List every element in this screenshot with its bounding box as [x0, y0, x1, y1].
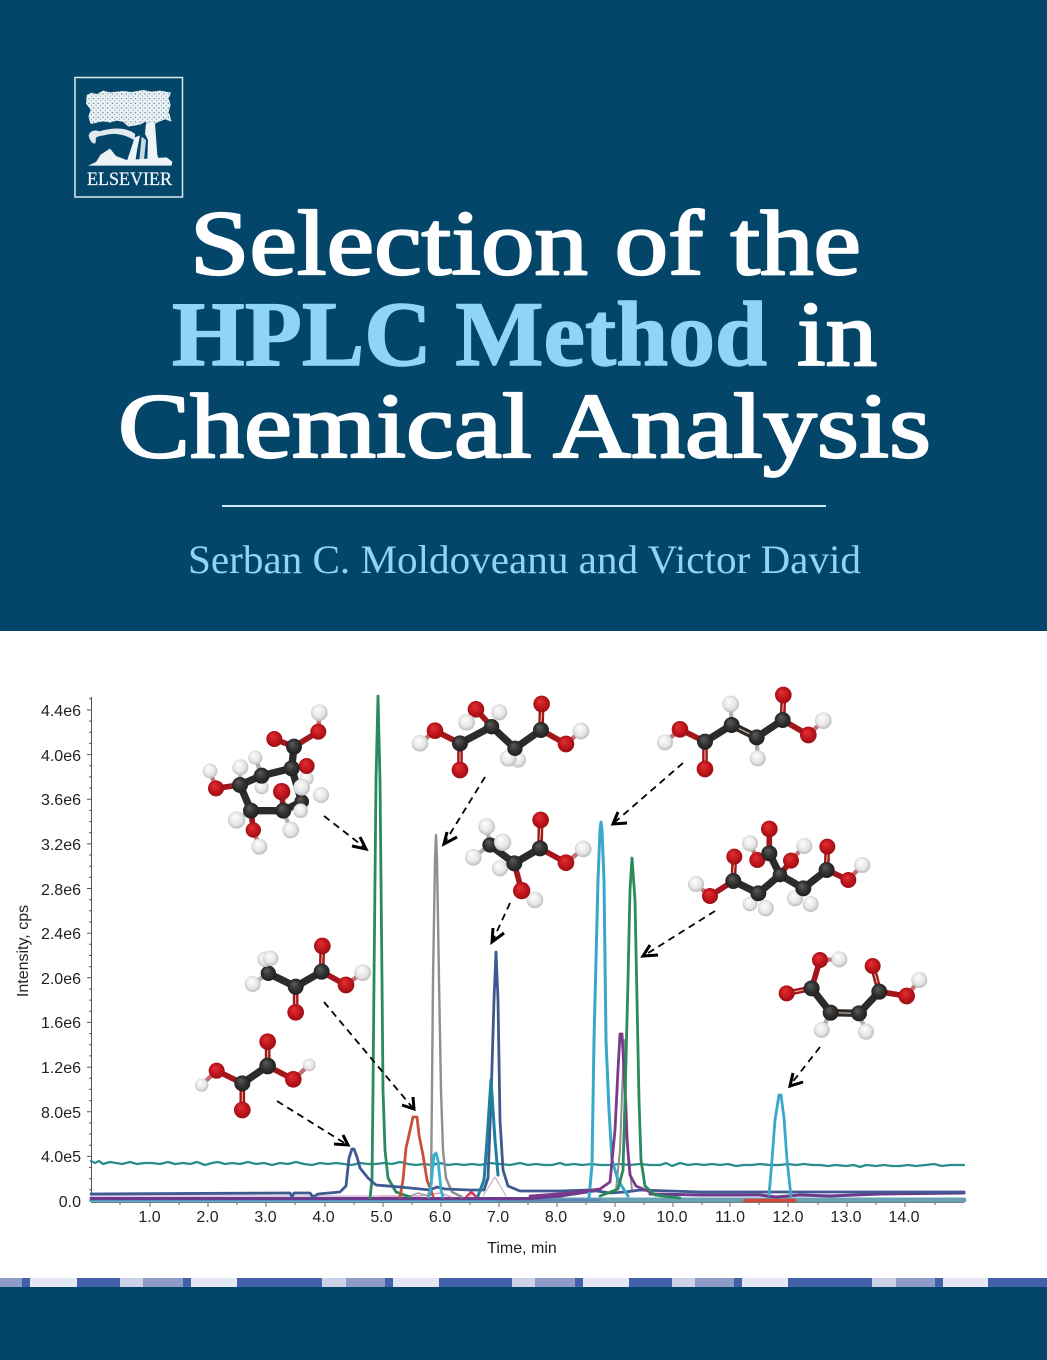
- y axis labels: 2.0e6: [41, 971, 81, 988]
- y axis labels: 1.2e6: [41, 1060, 81, 1077]
- chart white panel: [0, 631, 1047, 1278]
- arrow: maleic acid: [790, 1047, 820, 1086]
- chromatogram chart: [15, 687, 964, 1257]
- molecule: fumaric acid: [657, 687, 832, 777]
- x axis labels: 2.0: [196, 1209, 219, 1226]
- cyan peak at 8.8 min: [589, 822, 628, 1198]
- y axis labels: 1.6e6: [41, 1015, 81, 1032]
- arrow: malic acid: [444, 777, 485, 844]
- purple peak at 9.1 min: [530, 1034, 650, 1196]
- x axis labels: 6.0: [429, 1209, 451, 1226]
- decorative colour strip: [0, 1278, 1047, 1287]
- x axis labels: 1.0: [138, 1209, 161, 1226]
- x axis labels: 11.0: [715, 1209, 745, 1226]
- y axis labels: 4.0e5: [41, 1149, 81, 1166]
- x axis labels: [138, 1209, 920, 1226]
- x axis labels: 14.0: [888, 1209, 920, 1226]
- title: Chemical Analysis: [118, 375, 931, 477]
- x axis labels: 5.0: [370, 1209, 393, 1226]
- arrow: citric acid: [643, 911, 715, 956]
- molecule: citric acid: [688, 821, 870, 916]
- top navy title panel: [0, 0, 1047, 631]
- y axis title: Intensity, cps: [15, 905, 32, 997]
- arrow: quinic acid: [324, 816, 366, 849]
- arrow: fumaric acid: [613, 763, 683, 824]
- title: Selection of the: [190, 192, 861, 294]
- y axis labels: 3.2e6: [41, 837, 81, 854]
- arrow: pyruvic acid: [324, 1002, 414, 1109]
- baseline traces: [91, 1190, 964, 1201]
- green peak at 9.3 min: [600, 858, 680, 1198]
- y axis labels: 8.0e5: [41, 1105, 81, 1122]
- bottom navy band: [0, 1287, 1047, 1360]
- molecule: lactic acid: [465, 812, 592, 908]
- x axis labels: 9.0: [603, 1209, 625, 1226]
- x axis labels: 3.0: [254, 1209, 277, 1226]
- faint pink peak: [483, 1177, 506, 1196]
- teal baseline trace: [91, 1161, 964, 1167]
- icon: Elsevier logo: ELSEVIER: [87, 170, 173, 190]
- x axis labels: 8.0: [545, 1209, 567, 1226]
- y axis labels: 4.0e6: [41, 748, 81, 765]
- x axis labels: 12.0: [772, 1209, 804, 1226]
- y axis labels: 0.0: [59, 1194, 81, 1211]
- title: [118, 192, 931, 477]
- y axis labels: 4.4e6: [41, 703, 81, 720]
- green peak at 4.9 min: [370, 696, 410, 1198]
- x axis labels: 13.0: [830, 1209, 862, 1226]
- x axis labels: 10.0: [656, 1209, 688, 1226]
- icon: Elsevier logo: [75, 78, 182, 197]
- molecule: malic acid: [412, 696, 589, 778]
- molecule: maleic acid: [779, 951, 927, 1040]
- arrow: lactic acid: [492, 903, 510, 942]
- arrow: oxalic acid: [277, 1101, 348, 1145]
- y axis labels: 2.8e6: [41, 882, 81, 899]
- teal blue peak at 6.85 min: [478, 1080, 498, 1196]
- x axis labels: 4.0: [312, 1209, 335, 1226]
- y axis labels: [41, 703, 81, 1211]
- molecule: pyruvic acid: [245, 938, 371, 1021]
- molecule: oxalic acid: [195, 1033, 316, 1118]
- x axis title: Time, min: [487, 1240, 557, 1257]
- x axis labels: 7.0: [487, 1209, 509, 1226]
- cyan peak at 5.9 min: [429, 1153, 443, 1197]
- grey peak: [428, 835, 462, 1197]
- y axis labels: 3.6e6: [41, 792, 81, 809]
- title: in: [797, 283, 877, 385]
- title: HPLC Method: [172, 283, 767, 385]
- y axis with ticks: [87, 697, 92, 1202]
- navy trace with oxalic and lactic peaks: [91, 952, 964, 1197]
- cyan peak at 11.9 min: [769, 1095, 791, 1196]
- title divider rule: [222, 505, 826, 507]
- grey peak under purple: [616, 1040, 632, 1190]
- y axis labels: 2.4e6: [41, 926, 81, 943]
- x axis with ticks: [91, 1202, 964, 1207]
- molecule: quinic acid: [203, 704, 329, 855]
- red peak at 5.6 min: [400, 1117, 433, 1197]
- authors: Serban C. Moldoveanu and Victor David: [188, 537, 861, 582]
